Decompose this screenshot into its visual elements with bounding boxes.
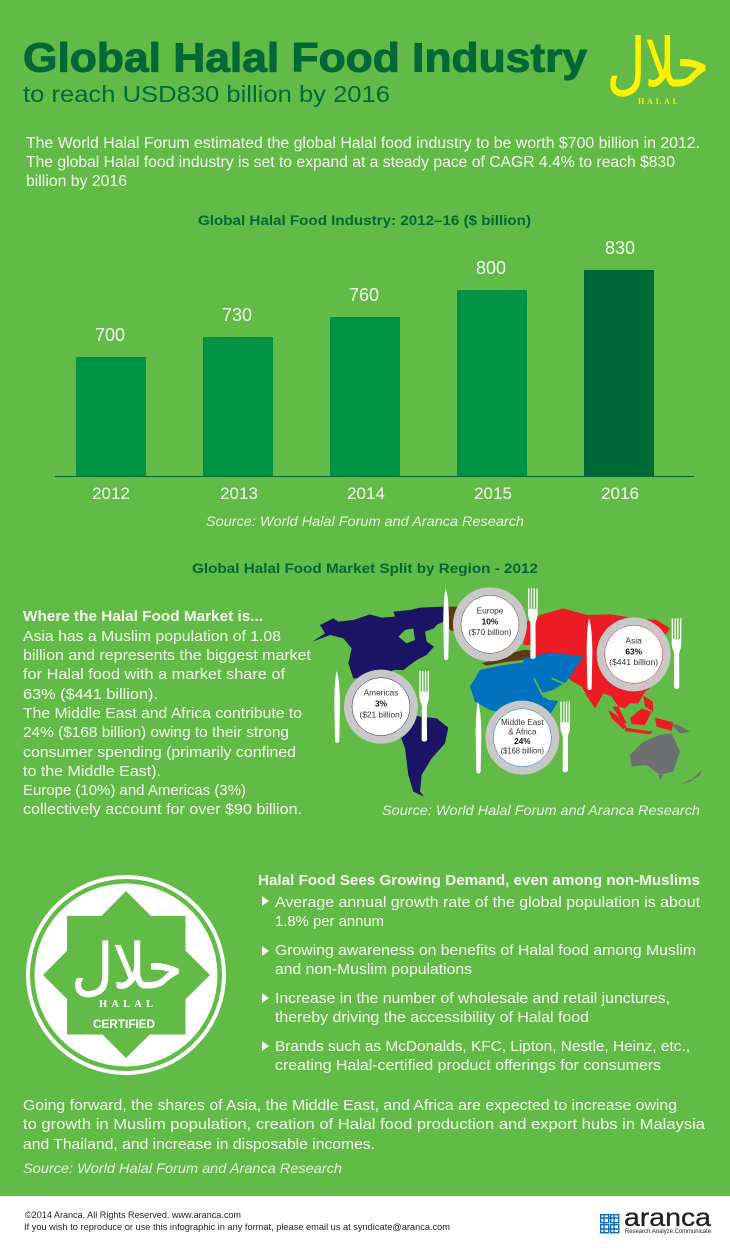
plate: Middle East and Africa — [476, 701, 570, 775]
region section heading: Global Halal Food Market Split by Region - 2012 — [192, 561, 538, 576]
text block: where the market is: collectively account for over $90 billion. — [23, 801, 302, 818]
bar chart: 2013 — [220, 484, 258, 503]
footer: If you wish to reproduce or use this infographic in any format, please email us at syndicate@aranca.com — [24, 1222, 450, 1233]
badge: halal certified: CERTIFIED — [93, 1017, 155, 1031]
outlook paragraph: to growth in Muslim population, creation of Halal food production and export hubs in Malaysia — [23, 1116, 706, 1133]
plate: Asia: ($441 billion) — [609, 657, 658, 667]
bar chart: 700 — [95, 325, 125, 345]
bar chart: 2015 — [474, 484, 512, 503]
text block: where the market is: for Halal food with a market share of — [23, 666, 286, 683]
plate: Middle East and Africa: & Africa — [508, 727, 537, 736]
plate: Asia: 63% — [625, 646, 643, 656]
text block: where the market is: Asia has a Muslim population of 1.08 — [23, 628, 281, 645]
badge: halal certified — [28, 877, 224, 1073]
plate: Middle East and Africa: ($168 billion) — [501, 746, 544, 755]
bullet list: demand drivers: thereby driving the accessibility of Halal food — [275, 1009, 589, 1026]
text block: where the market is: consumer spending (primarily confined — [23, 744, 296, 761]
text block: where the market is: 24% ($168 billion) owing to their strong — [23, 724, 289, 741]
intro text block: billion by 2016 — [26, 173, 127, 190]
map source: Source: World Halal Forum and Aranca Research — [382, 802, 700, 818]
plate: Europe: ($70 billion) — [468, 627, 512, 637]
text block: where the market is — [23, 608, 312, 818]
footer — [0, 1196, 730, 1251]
outlook paragraph — [23, 1097, 706, 1153]
chart heading: Global Halal Food Industry: 2012–16 ($ billion) — [198, 213, 531, 228]
map detail: Red Sea and Gulf — [534, 678, 563, 698]
bullet list: demand drivers: creating Halal-certified product offerings for consumers — [275, 1057, 661, 1074]
plate: Middle East and Africa: Middle East — [501, 718, 544, 727]
outlook source: Source: World Halal Forum and Aranca Research — [23, 1160, 342, 1176]
subtitle: to reach USD830 billion by 2016 — [23, 81, 390, 107]
map region: Middle East and Africa — [470, 652, 583, 715]
text block: where the market is: Where the Halal Food Market is... — [23, 608, 263, 625]
plate: Americas — [334, 670, 429, 744]
plate: Americas: 3% — [375, 699, 388, 709]
badge: halal certified: حلال — [71, 930, 183, 1003]
intro text block: The World Halal Forum estimated the global Halal food industry to be worth $700 billion in 2012. — [26, 135, 700, 152]
bullet list: demand drivers: Increase in the number of wholesale and retail junctures, — [275, 990, 670, 1007]
bar chart: 800 — [476, 258, 506, 278]
world map with plates — [313, 587, 702, 797]
bullet list: demand drivers: Brands such as McDonalds, KFC, Lipton, Nestle, Heinz, etc., — [275, 1038, 690, 1055]
bullet list: demand drivers: Average annual growth rate of the global population is about — [275, 894, 701, 911]
text block: where the market is: 63% ($441 billion). — [23, 686, 158, 703]
footer: Research.Analyze.Communicate — [625, 1229, 712, 1235]
bar chart: 760 — [349, 285, 379, 305]
text block: where the market is: Europe (10%) and Americas (3%) — [23, 782, 246, 799]
plate: Europe — [443, 587, 538, 661]
bullet list: demand drivers: and non-Muslim populations — [275, 961, 472, 978]
text block: where the market is: to the Middle East). — [23, 763, 161, 780]
plate: Asia: Asia — [626, 636, 642, 646]
bar chart: 830 — [605, 238, 635, 258]
plate: Asia — [587, 617, 681, 691]
bar chart: 2016 — [601, 484, 639, 503]
icon: yellow halal logo: HALAL — [638, 97, 678, 106]
icon: aranca logo mark — [600, 1214, 619, 1233]
text block: where the market is: The Middle East and Africa contribute to — [23, 705, 302, 722]
chart source: Source: World Halal Forum and Aranca Research — [206, 513, 524, 529]
bar chart: 730 — [222, 305, 252, 325]
plate: Europe: Europe — [477, 606, 504, 616]
title: Global Halal Food Industry — [23, 34, 587, 80]
bar chart: 2014 — [347, 484, 385, 503]
badge: halal certified: HALAL — [99, 999, 153, 1010]
bullet list: demand drivers: Growing awareness on benefits of Halal food among Muslim — [275, 942, 696, 959]
bullet list: demand drivers — [262, 894, 701, 1074]
map region: Europe — [443, 607, 533, 666]
footer: aranca — [624, 1204, 711, 1232]
plate: Middle East and Africa: 24% — [514, 737, 531, 746]
map region: Americas — [313, 607, 448, 797]
plate: Americas: Americas — [364, 688, 398, 698]
bullet list: demand drivers: 1.8% per annum — [275, 913, 384, 930]
bar chart — [55, 238, 694, 503]
outlook paragraph: and Thailand, and increase in disposable incomes. — [23, 1136, 375, 1153]
footer: ©2014 Aranca. All Rights Reserved. www.aranca.com — [25, 1210, 241, 1221]
intro text block: The global Halal food industry is set to expand at a steady pace of CAGR 4.4% to reach $830 — [26, 154, 675, 171]
icon: yellow halal logo: حلال — [607, 24, 709, 102]
demand heading: Halal Food Sees Growing Demand, even among non-Muslims — [258, 873, 700, 889]
plate: Americas: ($21 billion) — [359, 710, 403, 720]
intro text block — [26, 135, 700, 190]
map region: Asia — [523, 608, 673, 734]
plate: Europe: 10% — [482, 616, 499, 626]
map detail: Hudson Bay — [398, 628, 415, 643]
outlook paragraph: Going forward, the shares of Asia, the Middle East, and Africa are expected to increase owing — [23, 1097, 677, 1114]
map region: Oceania — [630, 723, 702, 785]
text block: where the market is: billion and represents the biggest market — [23, 647, 312, 664]
bar chart: 2012 — [92, 484, 130, 503]
